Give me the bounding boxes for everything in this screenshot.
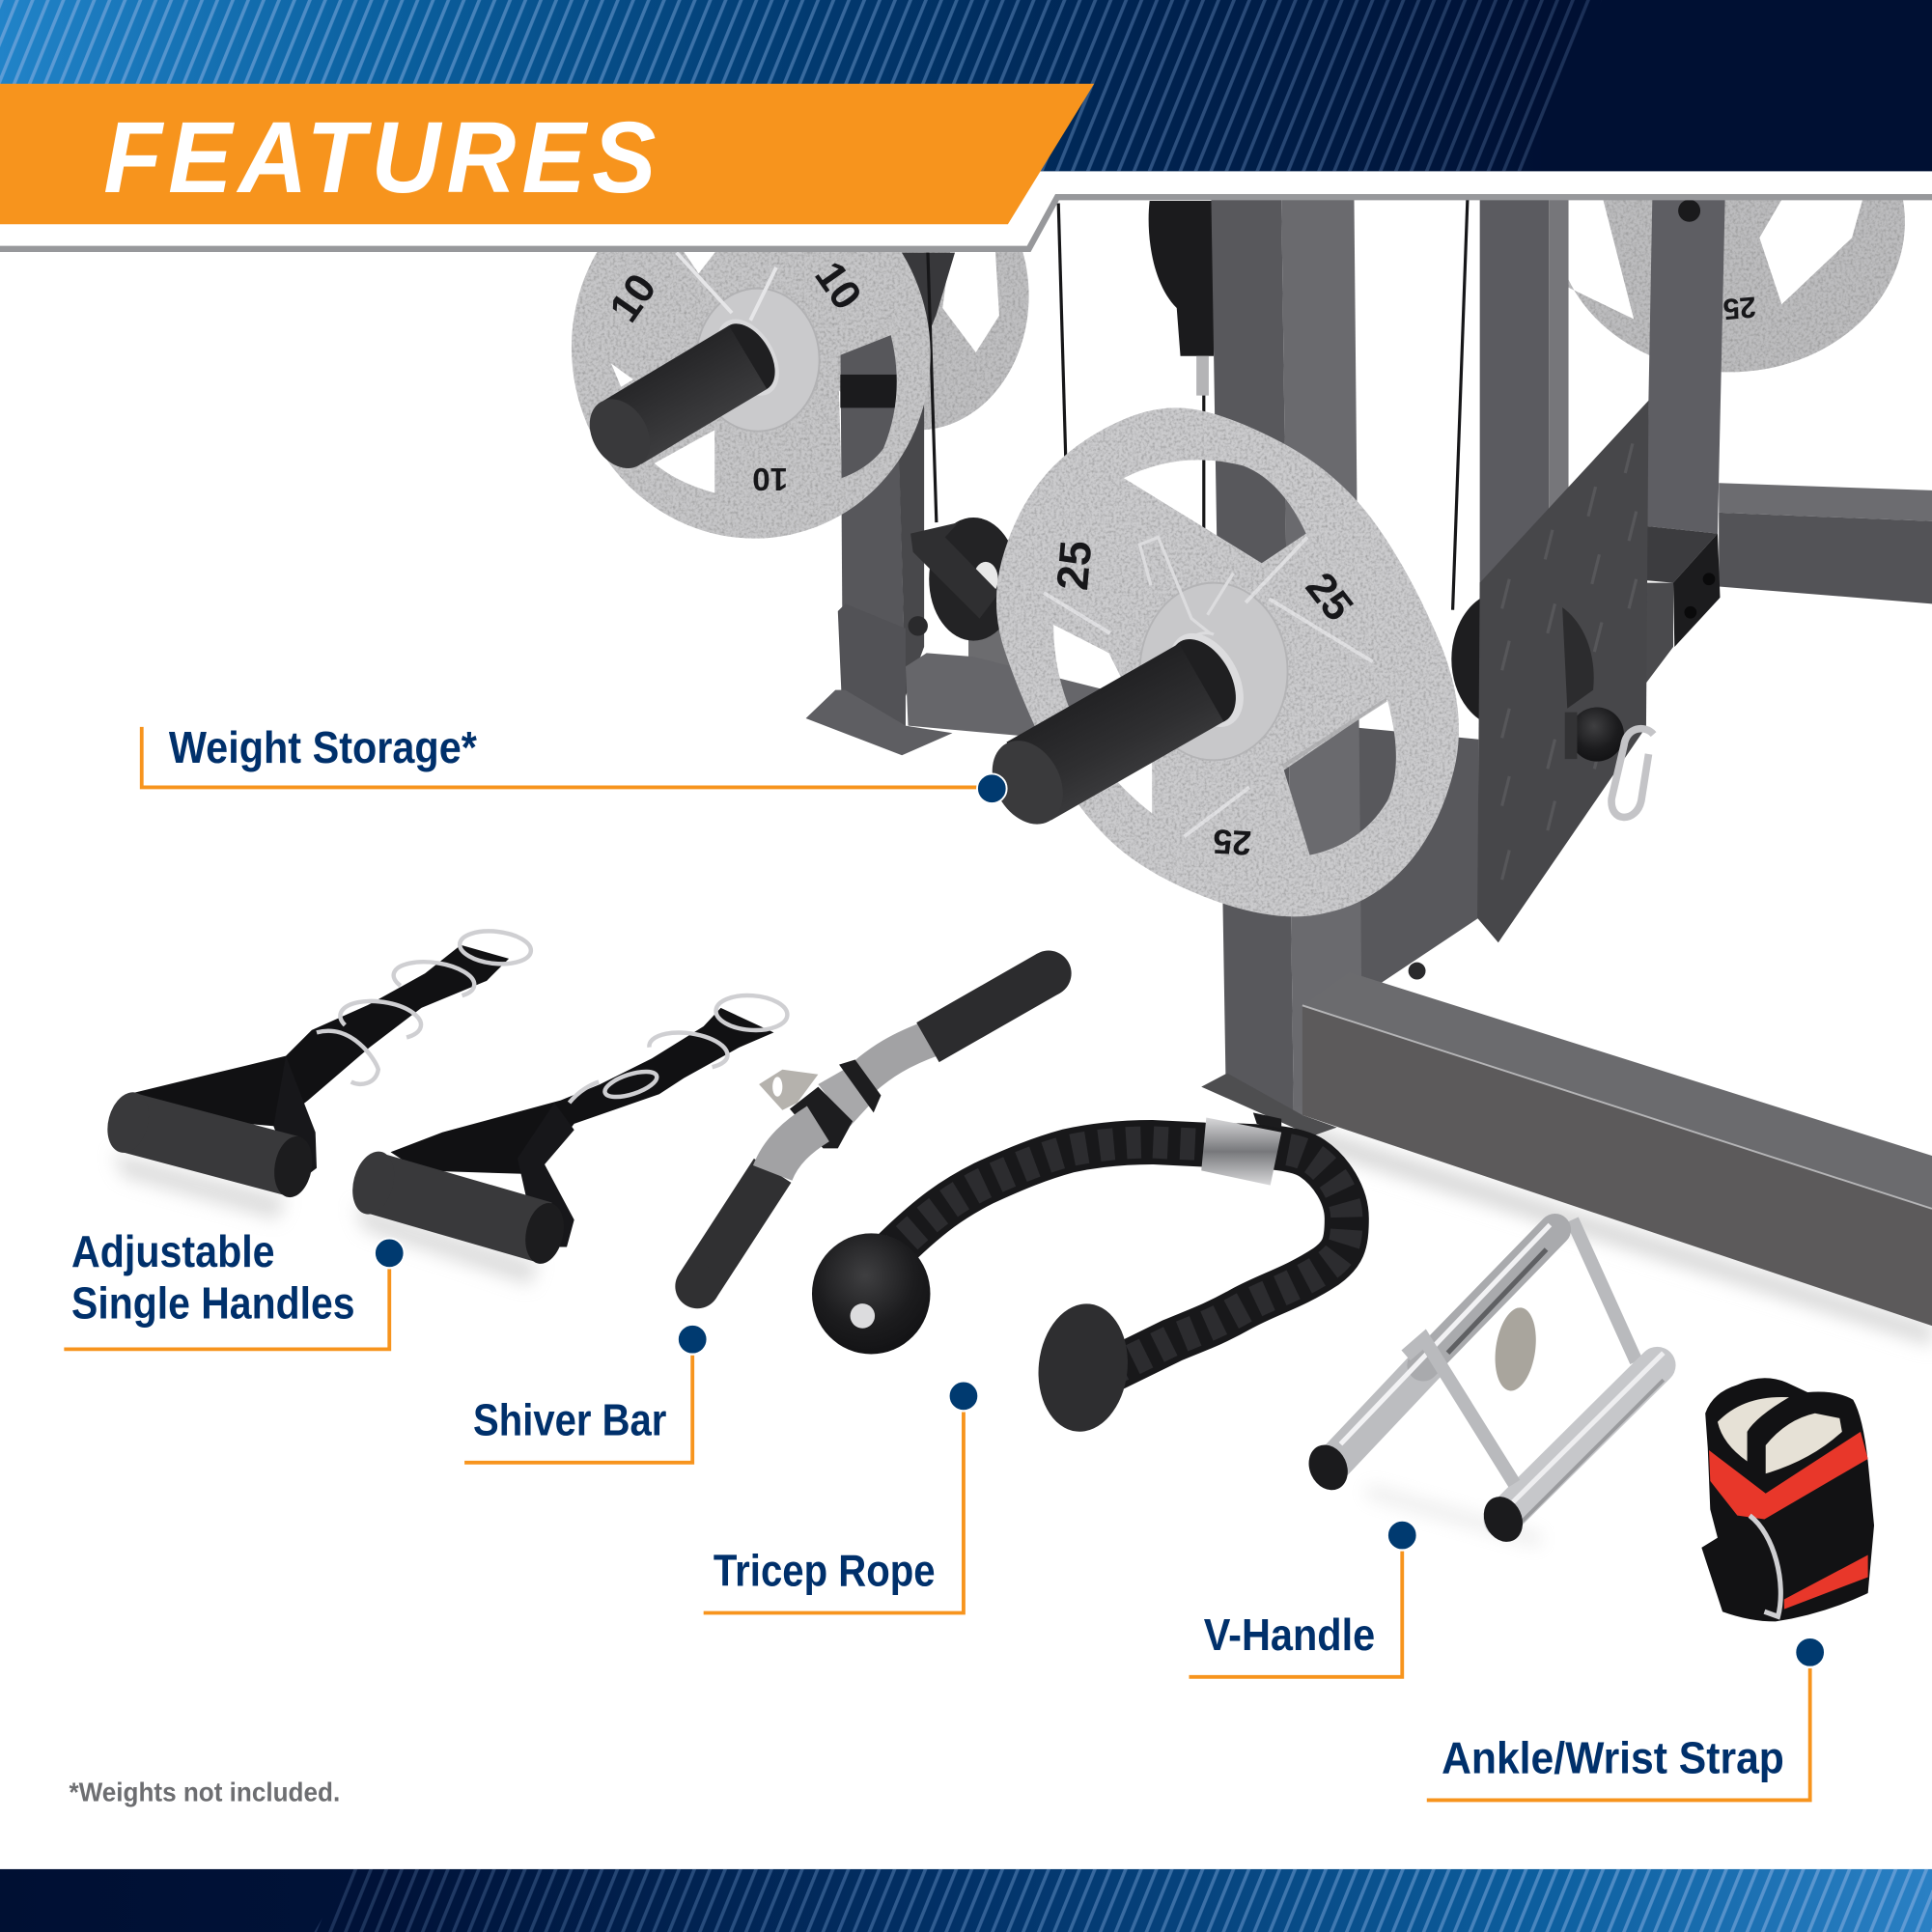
callout: v-handle bbox=[1189, 1521, 1417, 1677]
single handle two bbox=[346, 994, 789, 1285]
pulley in front of plate bbox=[1562, 607, 1594, 709]
callout: adjustable single handles: Single Handles bbox=[71, 1277, 355, 1328]
side loop bbox=[518, 1103, 574, 1246]
third upright bbox=[1646, 200, 1725, 534]
plate arm bbox=[1640, 583, 1673, 691]
swivel plate bbox=[1490, 1305, 1541, 1393]
small plate hub bbox=[696, 289, 820, 432]
callout: v-handle: V-Handle bbox=[1204, 1610, 1375, 1660]
callout: adjustable single handles bbox=[64, 1226, 405, 1349]
lower grip bbox=[675, 1170, 772, 1308]
callout: weight storage: Weight Storage* bbox=[169, 722, 477, 772]
large 25 lb weight plate bbox=[978, 407, 1459, 916]
callout: shiver bar: Shiver Bar bbox=[473, 1395, 666, 1445]
numeral bottom: 10 bbox=[752, 461, 788, 496]
numeral 25 bottom: 25 bbox=[1212, 822, 1252, 862]
rope twist bbox=[887, 1142, 1347, 1371]
numeral right: 10 bbox=[805, 254, 870, 319]
rear rod bbox=[1572, 1219, 1637, 1361]
bar shaft bbox=[862, 1038, 934, 1078]
lower shaft bbox=[772, 1124, 818, 1173]
dark column behind plates bbox=[894, 253, 955, 345]
title: FEATURES bbox=[103, 101, 656, 214]
gym machine frame bbox=[806, 71, 1932, 1346]
callout: adjustable single handles: Adjustable bbox=[71, 1226, 275, 1276]
left cross beam bbox=[906, 653, 1130, 745]
callout: tricep rope bbox=[704, 1382, 978, 1612]
end cap right bbox=[1476, 1490, 1529, 1549]
top pulley bbox=[1149, 201, 1214, 396]
ball stop and snap hook bbox=[1565, 708, 1654, 817]
left foot bbox=[806, 690, 952, 755]
v-handle bbox=[1302, 1219, 1664, 1549]
callout: ankle wrist strap: Ankle/Wrist Strap bbox=[1442, 1732, 1784, 1782]
end cap left bbox=[1302, 1439, 1355, 1497]
right ball bbox=[1032, 1300, 1134, 1436]
header divider line bbox=[0, 197, 1932, 249]
rear plate: upper right weight bbox=[1554, 71, 1905, 372]
pulley behind plate bbox=[1451, 590, 1560, 728]
pulley post bbox=[968, 600, 1013, 672]
rope bbox=[887, 1142, 1347, 1371]
callout: tricep rope: Tricep Rope bbox=[714, 1545, 936, 1595]
numeral 25 right: 25 bbox=[1297, 565, 1361, 630]
callout: weight storage bbox=[142, 722, 1007, 803]
upper grip bbox=[928, 951, 1072, 1043]
header band bbox=[0, 0, 1932, 171]
footnote: *Weights not included. bbox=[69, 1778, 340, 1807]
spring clip bbox=[677, 253, 776, 321]
rear plate: behind small weight bbox=[807, 161, 1029, 430]
front bar bbox=[1502, 1353, 1664, 1526]
numeral left: 10 bbox=[601, 266, 665, 330]
front rod bbox=[1406, 1339, 1514, 1483]
strap bbox=[128, 945, 509, 1126]
lower red band bbox=[1784, 1554, 1868, 1610]
left pulley bbox=[909, 518, 1018, 641]
cream lining right bbox=[1766, 1414, 1842, 1473]
main upright bbox=[1211, 200, 1362, 1115]
spoke highlights bbox=[1044, 537, 1386, 837]
rings bbox=[317, 928, 533, 1084]
left upright bbox=[838, 326, 924, 726]
rear beam bbox=[1719, 483, 1932, 603]
red band bbox=[1709, 1432, 1868, 1519]
junction bracket bbox=[1646, 526, 1721, 647]
swivel plate bbox=[759, 1070, 818, 1110]
footer band bbox=[0, 1869, 1932, 1932]
large peg bbox=[978, 621, 1259, 837]
left ball bbox=[812, 1233, 930, 1354]
single handle one bbox=[101, 928, 533, 1219]
ankle wrist strap bbox=[1701, 1378, 1874, 1621]
lower bracket behind plate bbox=[1349, 727, 1478, 1004]
cuff black bbox=[1701, 1378, 1874, 1621]
small peg bbox=[577, 308, 792, 480]
strap bbox=[391, 1008, 773, 1174]
callout: ankle wrist strap bbox=[1427, 1638, 1825, 1800]
plate body bbox=[996, 407, 1459, 916]
second upright bbox=[1480, 200, 1569, 740]
collar bbox=[790, 1059, 881, 1148]
grip bbox=[101, 1087, 317, 1200]
numeral 25 left: 25 bbox=[1047, 539, 1101, 592]
shiver bar bbox=[675, 951, 1072, 1308]
d-ring bbox=[1750, 1516, 1780, 1616]
spring clip bbox=[1139, 537, 1233, 665]
back bar bbox=[1330, 1224, 1554, 1468]
small plate body bbox=[572, 164, 931, 539]
rear plate numeral: 25 bbox=[1722, 290, 1757, 325]
white header cover bbox=[0, 0, 1932, 249]
cream lining left bbox=[1718, 1397, 1789, 1462]
grip bbox=[346, 1147, 569, 1268]
small weight plate on storage peg bbox=[572, 164, 931, 539]
side loop bbox=[273, 1056, 317, 1184]
rings bbox=[570, 994, 789, 1103]
hub bbox=[1139, 583, 1288, 760]
cables bbox=[928, 200, 1468, 610]
diamond plate bbox=[1477, 401, 1648, 942]
metal clamp bbox=[1201, 1112, 1281, 1186]
callout: shiver bar bbox=[464, 1325, 708, 1463]
base beam bbox=[1201, 963, 1932, 1346]
orange title banner bbox=[0, 84, 1094, 224]
tricep rope bbox=[812, 1112, 1347, 1436]
